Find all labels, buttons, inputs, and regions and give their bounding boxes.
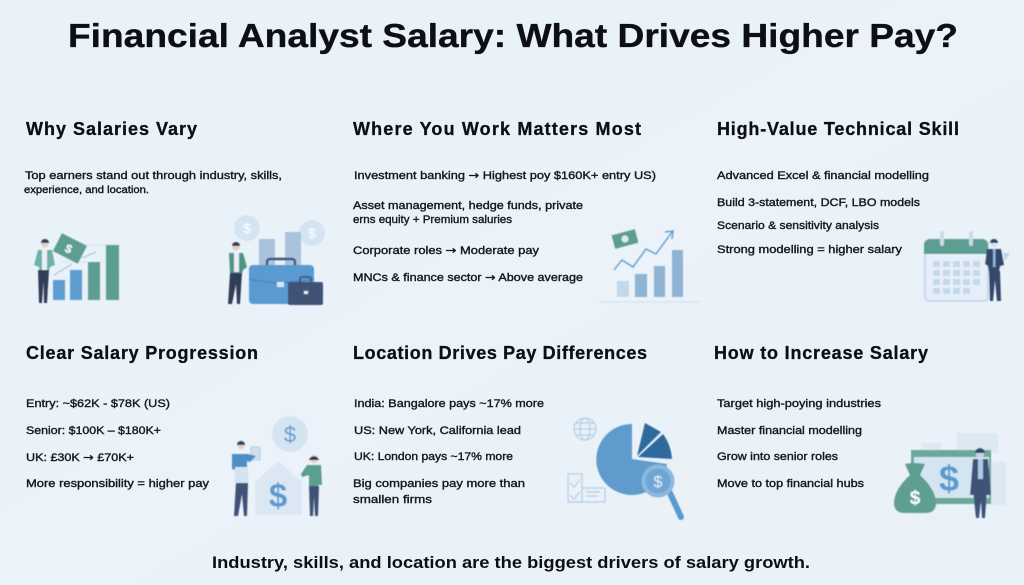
heading: high-value technical skill: High-Value Technical Skill: [717, 119, 959, 139]
icon: analyst with bar chart and banknote: [34, 233, 120, 303]
text block: salary progression: Senior: $100K – $180K+: [26, 425, 161, 437]
text block: salary progression: [26, 398, 209, 490]
panel: how to increase salary: [714, 343, 1006, 518]
text block: where you work: MNCs & finance sector → Above average: [353, 271, 583, 284]
text block: technical skills: Strong modelling = higher salary: [717, 244, 902, 256]
heading: how to increase salary: How to Increase Salary: [714, 343, 928, 363]
text block: technical skills: [717, 170, 929, 256]
heading: why salaries vary: Why Salaries Vary: [26, 119, 197, 139]
text block: technical skills: Build 3-statement, DCF, LBO models: [717, 197, 920, 209]
icon: money bag, banknote and businessman: [894, 433, 1006, 518]
text block: increase salary: Move to top financial hubs: [717, 478, 864, 490]
icon: pie chart with magnifier: [568, 418, 681, 517]
panel: where you work matters most: [353, 119, 700, 302]
icon: briefcases and investor: [228, 215, 325, 305]
text block: where you work: Investment banking → Highest poy $160K+ entry US): [354, 169, 656, 182]
text block: location differences: UK: London pays ~17% more: [354, 451, 513, 463]
text block: location differences: Big companies pay more than: [353, 478, 525, 490]
icon: rising line chart with banknote: [600, 229, 700, 302]
text block: salary progression: Entry: ~$62K - $78K (US): [26, 398, 170, 410]
text block: where you work: erns equity + Premium saluries: [353, 214, 512, 226]
heading: clear salary progression: Clear Salary Progression: [26, 343, 258, 363]
panel: why salaries vary: [24, 119, 282, 303]
text block: where you work: Corporate roles → Moderate pay: [353, 244, 539, 257]
icon: money bag, banknote and businessman: $: [910, 488, 921, 509]
text block: technical skills: Advanced Excel & financial modelling: [717, 170, 929, 182]
panel: high-value technical skill: [717, 119, 1010, 301]
text block: location differences: US: New York, California lead: [354, 425, 521, 437]
icon: two people with house and dollar: $: [284, 422, 296, 447]
icon: briefcases and investor: $: [308, 225, 316, 241]
text block: increase salary: Master financial modelling: [717, 425, 862, 437]
icon: two people with house and dollar: $: [269, 477, 287, 514]
icon: pie chart with magnifier: $: [654, 474, 663, 491]
text block: why salaries vary: [24, 170, 282, 196]
heading: where you work matters most: Where You Work Matters Most: [353, 119, 641, 139]
heading: location drives pay differences: Location Drives Pay Differences: [353, 343, 647, 363]
text block: where you work: Asset management, hedge funds, private: [353, 200, 583, 212]
text block: technical skills: Scenario & sensitivity analysis: [717, 220, 879, 232]
text block: location differences: smallen firms: [353, 494, 432, 506]
panel: location drives pay differences: [353, 343, 681, 517]
title: Financial Analyst Salary: What Drives Higher Pay?: [68, 17, 958, 54]
text block: why salaries vary: experience, and location.: [24, 185, 149, 196]
icon: two people with house and dollar: [232, 416, 322, 516]
icon: briefcases and investor: $: [243, 220, 251, 236]
text block: location differences: India: Bangalore pays ~17% more: [354, 398, 544, 410]
panel: clear salary progression: [26, 343, 322, 516]
text block: increase salary: Grow into senior roles: [717, 451, 838, 463]
text block: location differences: [353, 398, 544, 506]
text block: salary progression: UK: £30K → £70K+: [26, 451, 134, 464]
footer takeaway: Industry, skills, and location are the biggest drivers of salary growth.: [212, 553, 810, 572]
text block: increase salary: Target high-poying industries: [717, 398, 881, 410]
text block: salary progression: More responsibility = higher pay: [26, 478, 209, 490]
text block: where you work: [353, 169, 656, 284]
text block: why salaries vary: Top earners stand out through industry, skills,: [25, 170, 282, 182]
text block: increase salary: [717, 398, 881, 490]
icon: analyst with bar chart and banknote: $: [62, 241, 75, 257]
icon: money bag, banknote and businessman: $: [939, 458, 959, 499]
icon: calendar with analyst: [924, 231, 1010, 301]
